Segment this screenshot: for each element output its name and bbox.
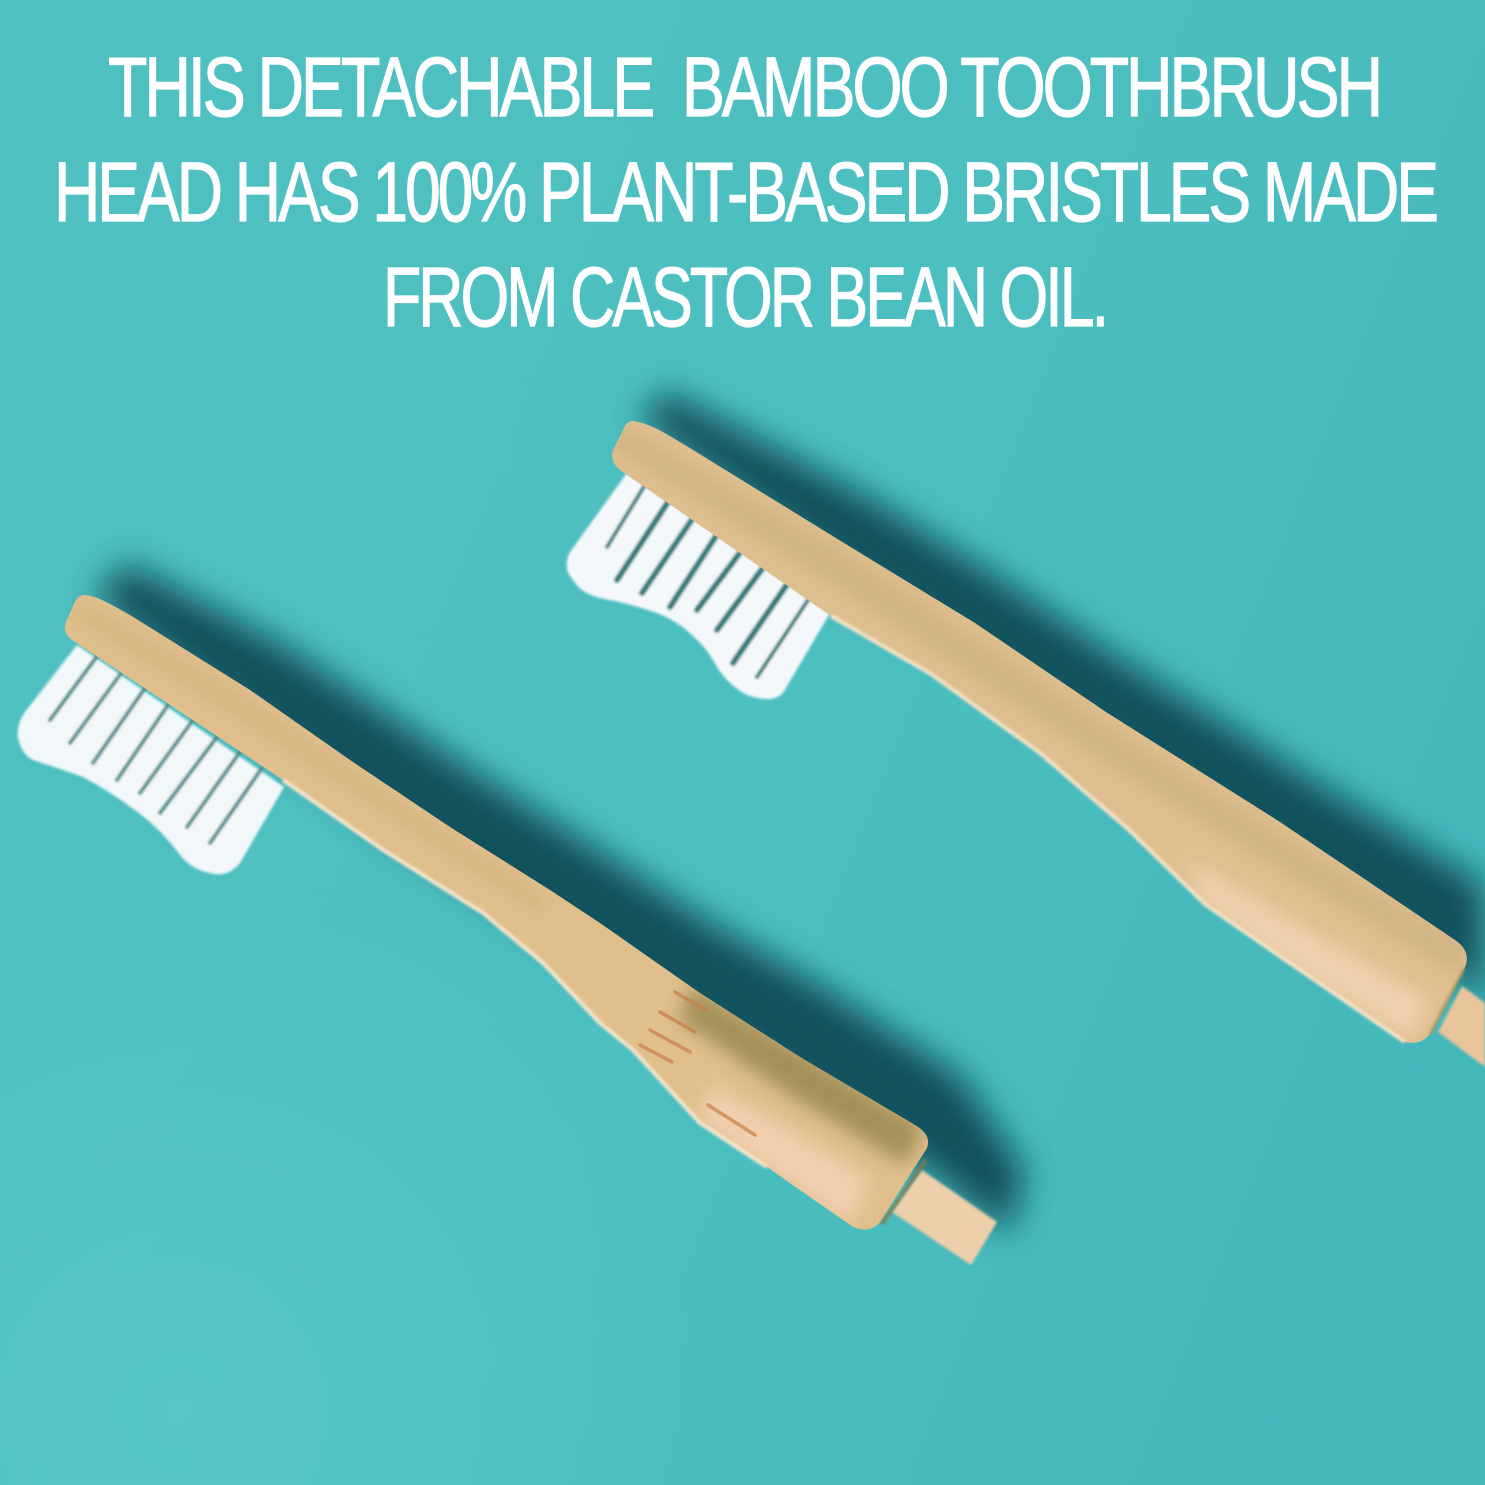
right peg xyxy=(1438,986,1485,1067)
left head shading xyxy=(84,612,536,903)
right peg divider xyxy=(1430,968,1464,1034)
left handle xyxy=(50,585,950,1245)
left lower edge highlight xyxy=(283,780,767,1167)
right grip highlight xyxy=(1190,860,1430,1040)
left grip dark band xyxy=(680,985,925,1165)
left peg divider xyxy=(882,1160,926,1224)
shadow: right toothbrush xyxy=(640,390,1485,1000)
left bristles xyxy=(18,645,284,874)
left handle grain xyxy=(640,992,755,1135)
left peg xyxy=(892,1170,997,1265)
left toothbrush xyxy=(18,585,997,1265)
title xyxy=(54,40,1437,344)
right handle shading xyxy=(610,425,1470,975)
right lower edge highlight xyxy=(831,616,1405,1042)
shadow: left toothbrush xyxy=(95,562,1025,1235)
title line 3: FROM CASTOR BEAN OIL. xyxy=(383,250,1106,344)
right handle xyxy=(600,410,1485,1060)
right bristles xyxy=(567,473,830,699)
left grip highlight xyxy=(700,1085,870,1225)
right toothbrush xyxy=(567,410,1485,1067)
